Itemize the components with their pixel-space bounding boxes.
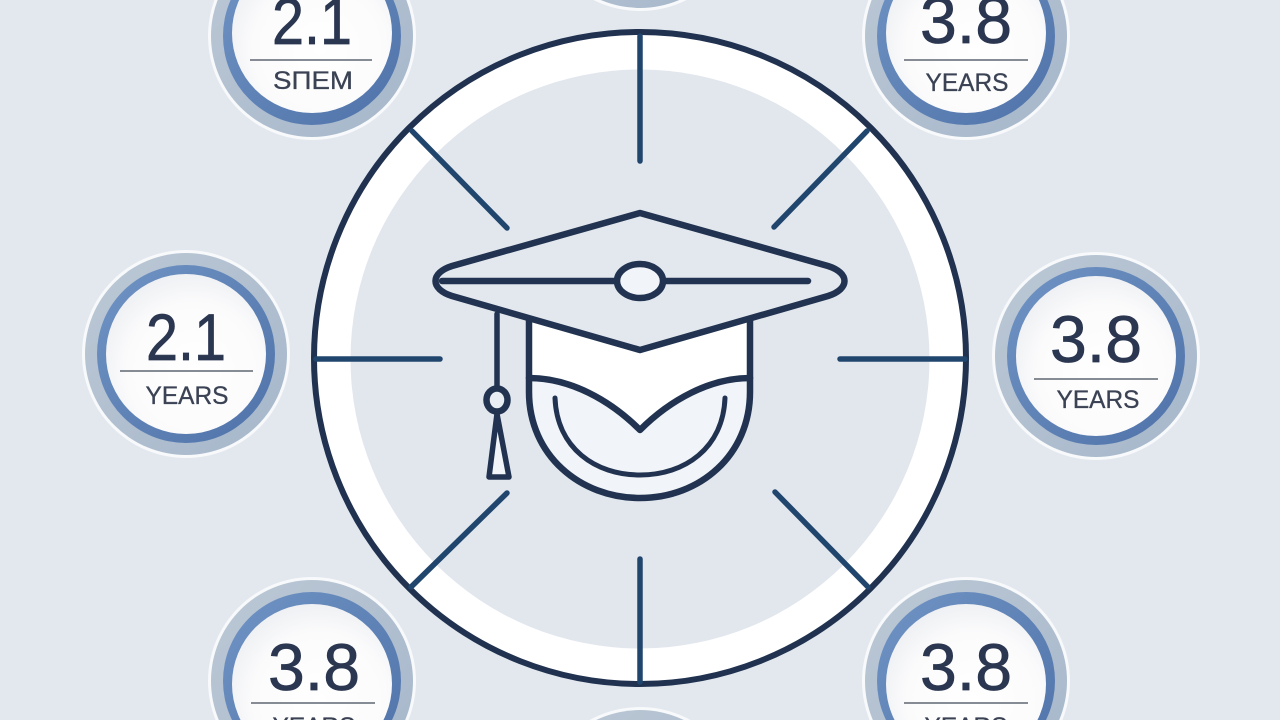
- tassel fringe: [489, 414, 509, 477]
- badge: left, 2.1 years: 2.1: [146, 300, 226, 374]
- cap body: [529, 318, 750, 498]
- badge: left, 2.1 years: YEARS: [146, 382, 228, 410]
- badge: bottom centre, clipped: [536, 707, 744, 720]
- badge: top right, 3.8 years: YEARS: [926, 69, 1008, 97]
- central dial: [314, 32, 966, 684]
- band lower edge: [529, 378, 750, 430]
- badge: top left, 2.1 STEM: [208, 0, 416, 140]
- badge: top centre, clipped: [536, 0, 744, 11]
- tassel cord: [494, 314, 500, 388]
- icon: graduation cap: [436, 213, 844, 498]
- badge: bottom right, 3.8 years: [862, 577, 1070, 720]
- mortarboard: [436, 213, 844, 350]
- tassel knot: [486, 388, 508, 412]
- inner arc: [555, 398, 725, 475]
- badge: right, 3.8 years: [992, 252, 1200, 460]
- badge: top left, 2.1 STEM: SΠEM: [273, 67, 353, 95]
- board centre line: [442, 278, 808, 284]
- badge: top right, 3.8 years: [862, 0, 1070, 140]
- badge: bottom right, 3.8 years: 3.8: [920, 630, 1012, 704]
- badge: bottom left, 3.8 years: 3.8: [268, 630, 360, 704]
- badge: left, 2.1 years: [82, 250, 290, 458]
- badge: right, 3.8 years: YEARS: [1056, 386, 1140, 414]
- cap outline: [529, 318, 750, 498]
- cap band: [529, 318, 750, 430]
- badge: bottom left, 3.8 years: [208, 577, 416, 720]
- badge: right, 3.8 years: 3.8: [1050, 302, 1142, 376]
- button: [617, 264, 663, 298]
